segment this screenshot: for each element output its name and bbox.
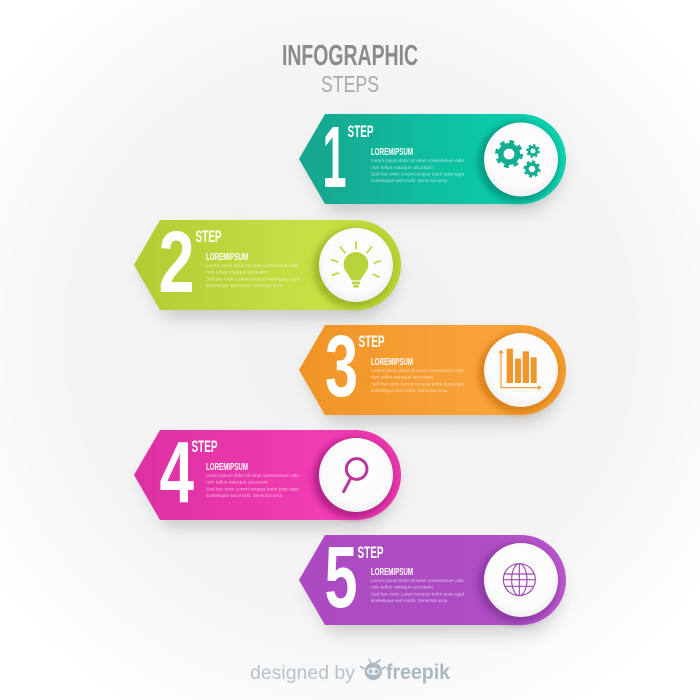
icon: bar chart [499, 349, 541, 390]
text block: Lorem ipsum dolor sit amet consectetuer odio [371, 158, 464, 163]
circle shade [478, 122, 558, 202]
white circle [319, 438, 393, 512]
panel: step 1: 1 [322, 109, 346, 206]
text block: LOREMIPSUM [206, 461, 248, 473]
card body [299, 114, 566, 204]
card body [134, 430, 401, 520]
step label: STEP [192, 438, 218, 456]
text block: Sed hac enim Lorem tempus tortor justo eget [371, 382, 465, 386]
panel: step 3 [299, 318, 566, 423]
text block: LOREMIPSUM [371, 146, 413, 158]
text block: Sed hac enim Lorem tempus tortor justo eget [206, 486, 300, 492]
text block [206, 251, 300, 288]
text block: non tellus natoque accusam [371, 584, 433, 590]
white circle [484, 543, 558, 617]
card shadow [140, 440, 397, 528]
panel: step 2 [134, 214, 401, 318]
card body [299, 325, 566, 415]
text block [371, 356, 465, 393]
panel: step 5 [299, 529, 566, 633]
text block: non tellus natoque accusam [371, 165, 433, 170]
text block: scelerisque sed morbi. Senectus urna [371, 388, 447, 393]
white circle [484, 333, 558, 407]
text block: non tellus natoque accusam [206, 480, 268, 484]
card body [134, 220, 401, 310]
card shadow [305, 545, 562, 633]
text block [371, 566, 465, 603]
card body [299, 535, 566, 625]
circle shade [313, 438, 393, 518]
text block: Sed hac enim Lorem tempus tortor justo eget [206, 276, 300, 282]
text block: LOREMIPSUM [371, 566, 413, 578]
subheading: steps: STEPS [321, 71, 379, 97]
footer: freepik credit [250, 659, 450, 684]
text block: non tellus natoque accusam [371, 374, 433, 380]
text block: non tellus natoque accusam [206, 270, 268, 274]
text block [206, 461, 300, 498]
icon: gears [497, 142, 540, 177]
text block: Lorem ipsum dolor sit amet consectetuer odio [206, 263, 299, 268]
card shadow [305, 335, 562, 423]
text block: LOREMIPSUM [371, 356, 413, 368]
text block: scelerisque sed morbi. Senectus urna [206, 283, 282, 288]
icon: globe [503, 564, 535, 596]
text block [371, 146, 465, 183]
text block: Lorem ipsum dolor sit amet consectetuer odio [206, 473, 299, 478]
white circle [319, 228, 393, 302]
icon: light bulb [332, 242, 380, 288]
heading: infographic: INFOGRAPHIC [282, 40, 418, 72]
freepik wordmark: freepik [386, 661, 450, 684]
text block: scelerisque sed morbi. Senectus urna [371, 178, 447, 183]
number 4: 4 [160, 424, 194, 521]
panel: step 1 [299, 109, 566, 212]
white circle [484, 122, 558, 196]
circle shade [478, 333, 558, 413]
panel: step 4 [134, 424, 401, 528]
text block: LOREMIPSUM [206, 251, 248, 263]
circle shade [313, 228, 393, 308]
step label: STEP [348, 123, 374, 141]
icon: magnifier [344, 459, 367, 492]
text block: Sed hac enim Lorem tempus tortor justo eget [371, 592, 465, 596]
step label: STEP [358, 544, 384, 562]
step label: STEP [196, 228, 222, 246]
designed by text: designed by [250, 663, 356, 684]
text block: scelerisque sed morbi. Senectus urna [371, 598, 447, 603]
number 3: 3 [325, 318, 358, 415]
circle shade [478, 543, 558, 623]
text block: scelerisque sed morbi. Senectus urna [206, 493, 282, 498]
number 5: 5 [324, 529, 358, 626]
card shadow [140, 230, 397, 318]
icon: freepik mascot [361, 659, 385, 680]
text block: Lorem ipsum dolor sit amet consectetuer odio [371, 578, 464, 583]
step label: STEP [358, 333, 384, 351]
text block: Lorem ipsum dolor sit amet consectetuer odio [371, 368, 464, 373]
number 2: 2 [158, 214, 194, 311]
title [282, 40, 418, 97]
text block: Sed hac enim Lorem tempus tortor justo eget [371, 172, 465, 176]
card shadow [305, 124, 562, 212]
